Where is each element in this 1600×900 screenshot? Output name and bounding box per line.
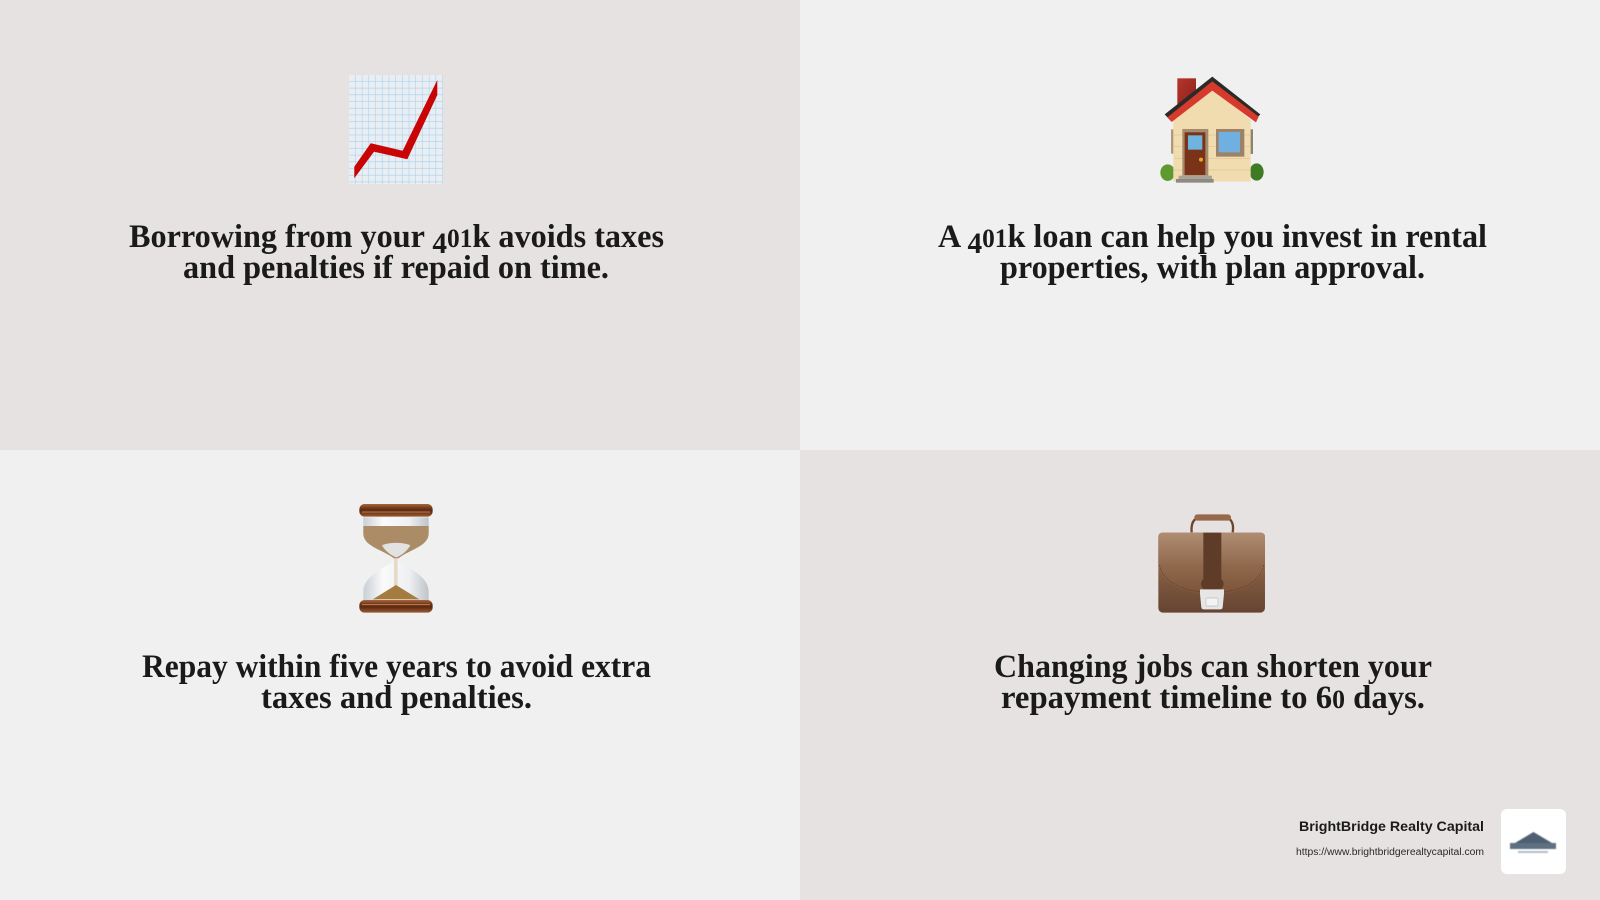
heading: borrowing: 01 xyxy=(447,224,472,253)
heading: borrowing: 4 xyxy=(432,227,447,260)
heading: borrowing: and penalties if repaid on time. xyxy=(183,250,609,286)
heading: rental: 4 xyxy=(968,227,982,260)
panel: rental properties xyxy=(800,0,1600,450)
logo card xyxy=(1501,809,1566,874)
brand name: BrightBridge Realty Capital xyxy=(1299,818,1484,834)
heading: five years xyxy=(142,649,651,716)
icon: rising chart xyxy=(349,75,443,184)
heading: rental: properties, with plan approval. xyxy=(1000,250,1425,286)
icon: house xyxy=(1160,77,1264,183)
heading: job change: repayment timeline to 60 days. xyxy=(1001,680,1425,716)
heading: borrowing: k avoids taxes xyxy=(472,219,669,255)
heading: five years: Repay within five years to avoid extra xyxy=(142,649,651,685)
heading: rental: 01 xyxy=(982,224,1007,253)
icon: briefcase xyxy=(1158,514,1265,613)
heading: rental: k loan can help you invest in rental xyxy=(1007,219,1499,255)
heading: job change xyxy=(994,649,1432,716)
panel: borrowing from a 401k xyxy=(0,0,800,450)
heading: job change: Changing jobs can shorten your xyxy=(994,649,1432,685)
website url: https://www.brightbridgerealtycapital.com xyxy=(1296,847,1484,858)
heading: five years: taxes and penalties. xyxy=(261,680,532,716)
heading: rental: A xyxy=(938,219,960,255)
heading: borrowing xyxy=(129,219,664,286)
heading: borrowing: Borrowing from your xyxy=(129,219,432,255)
panel: changing jobs xyxy=(800,450,1600,900)
icon: hourglass xyxy=(359,504,433,613)
heading: rental xyxy=(938,219,1487,286)
panel: repayment window xyxy=(0,450,800,900)
